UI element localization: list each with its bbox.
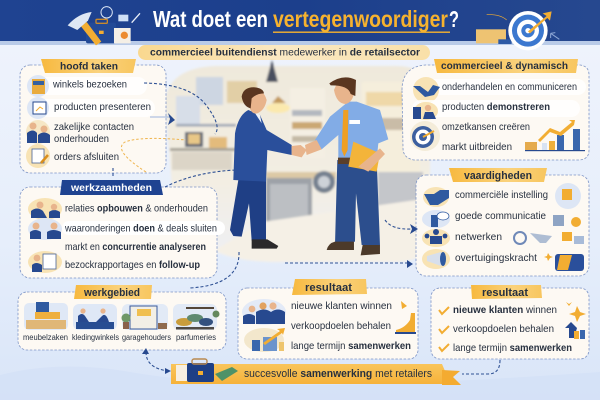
ribbon: resultaat midden: resultaat (305, 282, 352, 294)
ribbon: resultaat rechts: resultaat (482, 287, 528, 299)
icon: hammer and briefcase (68, 7, 140, 45)
bottom banner: succesvolle samenwerking: succesvolle samenwerking met retailers (244, 368, 432, 380)
item: commerciele instelling: commerciële instelling (455, 190, 548, 201)
item: omzetkansen creeren: omzetkansen creëren (442, 122, 530, 133)
arrow: orders to store (121, 138, 186, 172)
text: resultaat items: lange termijn samenwerken (291, 341, 411, 352)
store background (165, 60, 430, 262)
header band (0, 0, 600, 45)
item: parfumeries: parfumeries (176, 333, 216, 342)
item: goede communicatie (422, 210, 581, 228)
item: producten demonstreren (412, 100, 580, 120)
arrow: winkels bezoeken to store (144, 83, 217, 134)
item: relaties opbouwen (28, 198, 208, 220)
panel: resultaat midden (238, 279, 418, 359)
arrow: scene to vaardigheden (385, 220, 418, 234)
item: relaties opbouwen: relaties opbouwen & onderhouden (65, 204, 208, 214)
icon: growth chart (525, 120, 585, 151)
item: garagehouders (122, 304, 171, 342)
title: ? (449, 6, 459, 32)
ribbon: hoofd taken: hoofd taken (60, 60, 118, 72)
ribbon: werkzaamheden (60, 180, 163, 195)
icon: team (242, 299, 286, 325)
arrow: werkgebied to banner (142, 348, 171, 374)
text: markt en concurrentie analyseren: markt en concurrentie analyseren (65, 242, 206, 253)
item: meubelzaken: meubelzaken (23, 333, 68, 342)
person: left man in navy suit (230, 87, 307, 249)
item: producten presenteren: producten presenteren (54, 102, 151, 113)
ribbon: werkzaamheden: werkzaamheden (70, 183, 152, 194)
item: overtuigingskracht (422, 249, 584, 271)
panel: vaardigheden (416, 168, 589, 276)
icon: banknotes (215, 367, 238, 381)
icon: target with arrow (476, 11, 559, 50)
ribbon: vaardigheden (449, 168, 547, 182)
icon: growth chart (244, 328, 285, 352)
bottom banner: succesvolle samenwerking (171, 359, 461, 385)
icon: sparkles (566, 302, 586, 322)
text: resultaat items (291, 301, 411, 352)
item: meubelzaken (23, 302, 68, 342)
ribbon: werkgebied (74, 285, 152, 299)
item: bezoekrapportages (28, 251, 200, 273)
item: kledingwinkels: kledingwinkels (72, 333, 119, 342)
ribbon: commercieel en dynamisch: commercieel & dynamisch (441, 60, 568, 72)
arrow: hoofd taken to werkzaamheden (112, 168, 114, 178)
item: nieuwe klanten winnen: nieuwe klanten winnen (453, 305, 557, 316)
item: omzetkansen creeren: markt uitbreiden (442, 142, 512, 153)
arrow: werkzaamheden to werkgebied (190, 252, 239, 288)
item: netwerken: netwerken (455, 232, 502, 243)
item: omzetkansen creeren (410, 121, 530, 153)
item: orders afsluiten: orders afsluiten (54, 152, 119, 163)
icon: gold figure (395, 301, 416, 334)
item: netwerken (422, 229, 584, 247)
panel: werkgebied (18, 285, 226, 350)
item: lange termijn samenwerken: lange termijn samenwerken (453, 343, 572, 354)
item: parfumeries (173, 304, 220, 342)
item: onderhandelen: onderhandelen en communiceren (442, 82, 577, 93)
item: winkels bezoeken: winkels bezoeken (52, 80, 127, 90)
item: overtuigingskracht: overtuigingskracht (455, 253, 537, 264)
item: verkoopdoelen behalen: verkoopdoelen behalen (453, 324, 554, 335)
icon: bar chart arrow (565, 322, 585, 339)
ribbon: resultaat rechts (471, 285, 542, 299)
title: vertegenwoordiger (273, 6, 448, 32)
ribbon: werkgebied: werkgebied (83, 287, 140, 299)
arrow: resultaat to banner (462, 360, 500, 374)
item: zakelijke contacten onderhouden: zakelijke contacten (54, 122, 134, 133)
item: waarderingen doen (28, 218, 225, 240)
item: winkels bezoeken (27, 75, 147, 97)
illustration: handshake in retail store (165, 60, 430, 262)
item: zakelijke contacten onderhouden: onderhouden (54, 134, 109, 145)
person: right man in blue shirt (305, 77, 388, 255)
item: producten presenteren (27, 97, 155, 119)
item: garagehouders: garagehouders (122, 333, 171, 342)
arrow: producten to store (150, 113, 175, 125)
panel: hoofd taken (20, 59, 166, 173)
item: onderhandelen (413, 77, 586, 103)
item: goede communicatie: goede communicatie (455, 211, 546, 222)
item: waarderingen doen: waaronderingen doen & deals sluiten (64, 224, 217, 234)
arrow: werkzaamheden to scene (165, 170, 236, 187)
panel: werkzaamheden (20, 180, 225, 278)
item: orders afsluiten (26, 144, 119, 168)
text: resultaat items: verkoopdoelen behalen (291, 321, 391, 332)
ribbon: resultaat midden (292, 279, 367, 295)
subtitle banner: commercieel buitendienst medewerker in de retailsector (150, 48, 420, 58)
icon: briefcase (176, 359, 214, 382)
item: producten demonstreren: producten demonstreren (442, 102, 550, 113)
title: Wat doet een (153, 6, 268, 32)
item: kledingwinkels (72, 304, 119, 342)
panel: commercieel en dynamisch (402, 59, 589, 160)
arrow: scene bottom to vaardigheden (285, 260, 413, 268)
ribbon: vaardigheden: vaardigheden (464, 170, 532, 182)
title (153, 6, 459, 33)
item: zakelijke contacten onderhouden (26, 120, 134, 145)
subtitle banner (138, 45, 430, 60)
item: commerciele instelling (423, 183, 581, 209)
panel: resultaat rechts (431, 285, 589, 359)
ribbon: hoofd taken (41, 59, 136, 73)
item: bezoekrapportages: bezockrapportages en follow-up (65, 260, 200, 271)
text: resultaat items: nieuwe klanten winnen (291, 301, 392, 312)
